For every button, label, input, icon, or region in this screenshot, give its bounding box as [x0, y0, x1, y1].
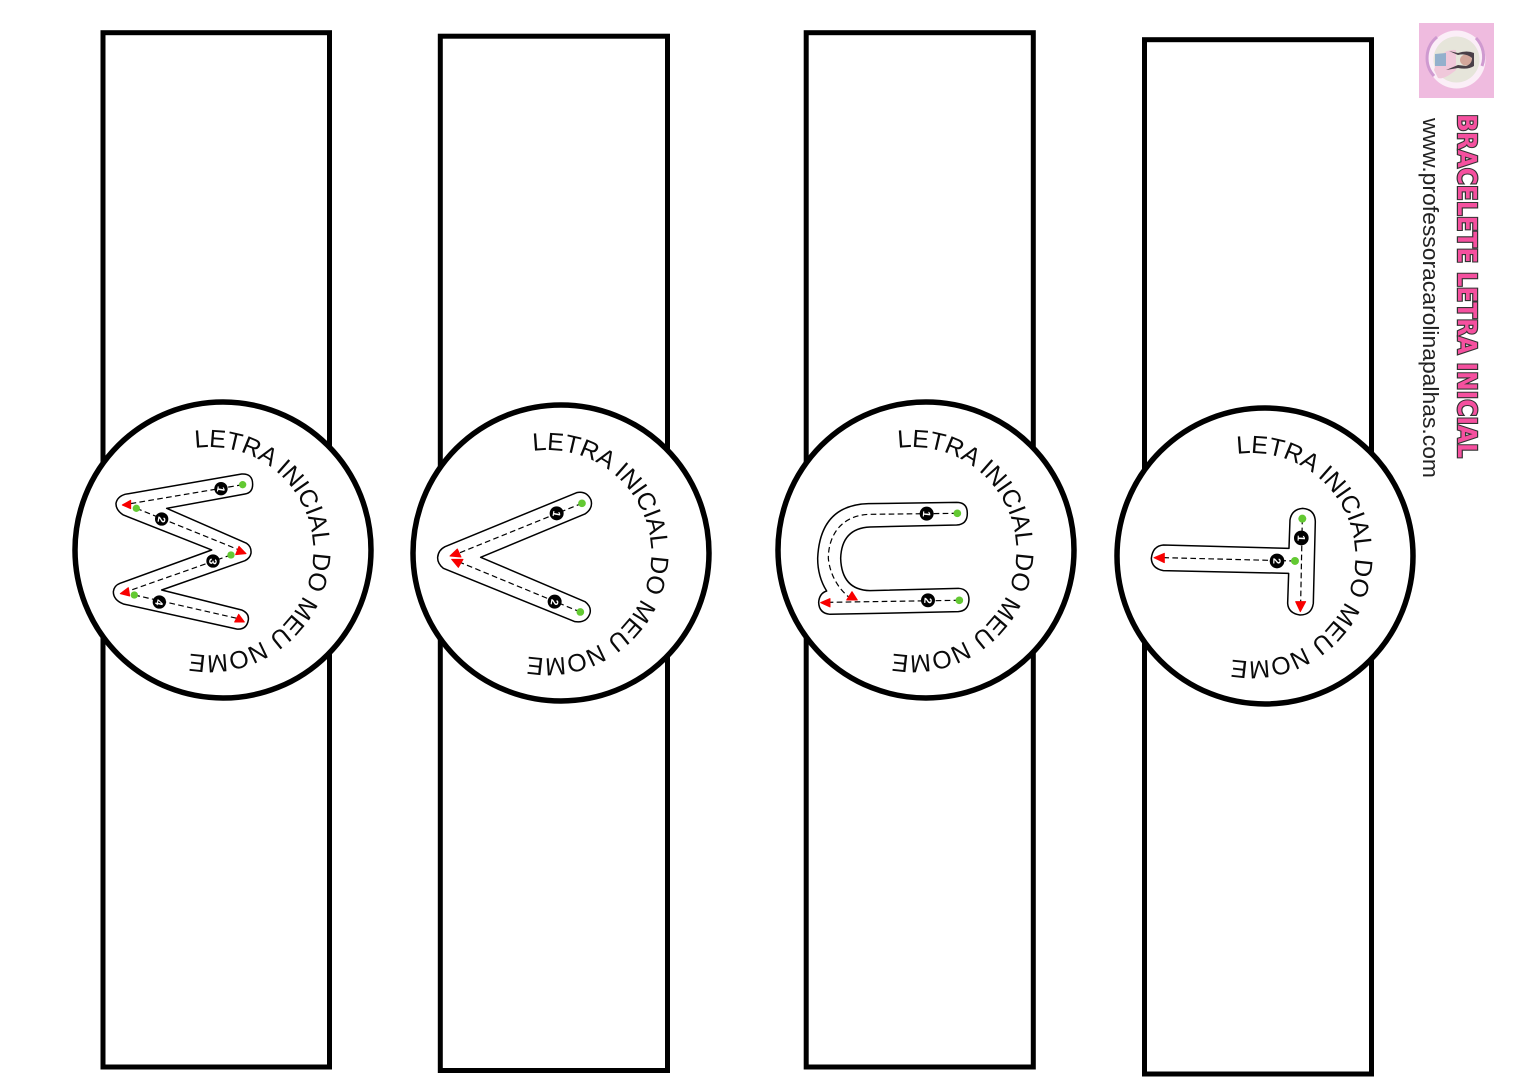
letter U tracing guide: 2 — [921, 597, 934, 604]
circular caption 4: LETRA INICIAL DO MEU NOME — [1231, 436, 1372, 678]
title: Bracelete Letra Inicial: BRACELETE LETRA INICIAL — [1451, 114, 1481, 458]
letter M tracing guide: 2 — [155, 516, 167, 524]
letter V tracing guide: 1 — [550, 510, 562, 518]
letter U tracing guide — [818, 502, 969, 614]
badge 1: letter M — [72, 399, 374, 701]
circular caption 3: LETRA INICIAL DO MEU NOME — [892, 430, 1034, 672]
badge 4: letter T — [1114, 405, 1416, 707]
letter T tracing guide: 1 — [1295, 535, 1307, 541]
bracelet strip 4 — [1144, 40, 1372, 1074]
logo avatar — [1419, 23, 1494, 98]
badge 3: letter U — [775, 399, 1077, 701]
bracelet strip 1 — [103, 33, 330, 1067]
circular caption 2: LETRA INICIAL DO MEU NOME — [527, 432, 668, 676]
letter V tracing guide — [438, 492, 591, 622]
letter U tracing guide: 1 — [920, 510, 932, 517]
letter M tracing guide — [113, 474, 253, 629]
letter T tracing guide — [1151, 508, 1315, 615]
bracelet strip 2 — [440, 36, 668, 1071]
website url: www.professoracarolinapalhas.com — [1418, 117, 1443, 478]
letter M tracing guide: 4 — [152, 599, 165, 607]
letter T tracing guide: 2 — [1270, 558, 1282, 564]
bracelet strip 3 — [806, 33, 1033, 1067]
badge 2: letter V — [410, 402, 712, 704]
letter V tracing guide: 2 — [548, 598, 560, 606]
circular caption 1: LETRA INICIAL DO MEU NOME — [189, 430, 330, 672]
letter M tracing guide: 3 — [206, 558, 219, 566]
letter M tracing guide: 1 — [214, 485, 227, 493]
